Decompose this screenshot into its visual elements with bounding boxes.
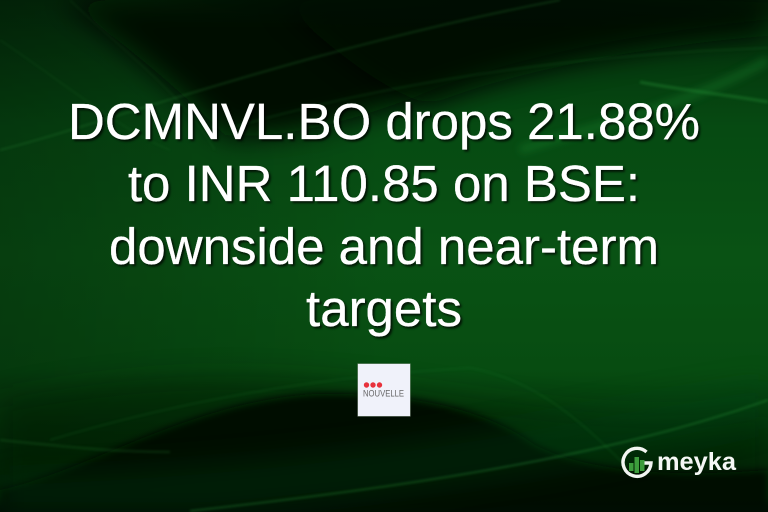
light streaks	[0, 0, 560, 150]
bottom dark hump	[0, 394, 768, 512]
title: DCMNVL.BO drops 21.88%	[68, 93, 700, 150]
title	[68, 93, 702, 340]
company logo: Nouvelle	[358, 364, 410, 416]
top dark blob	[60, 0, 768, 136]
wordmark: meyka	[657, 448, 737, 476]
title: targets	[306, 280, 462, 337]
company logo: Nouvelle: NOUVELLE	[363, 388, 404, 398]
brand logo: meyka	[621, 446, 737, 478]
title: to INR 110.85 on BSE:	[128, 155, 640, 212]
bottom dim band	[0, 377, 768, 512]
icon: ring with bars	[623, 448, 651, 476]
title: downside and near-term	[109, 218, 659, 275]
